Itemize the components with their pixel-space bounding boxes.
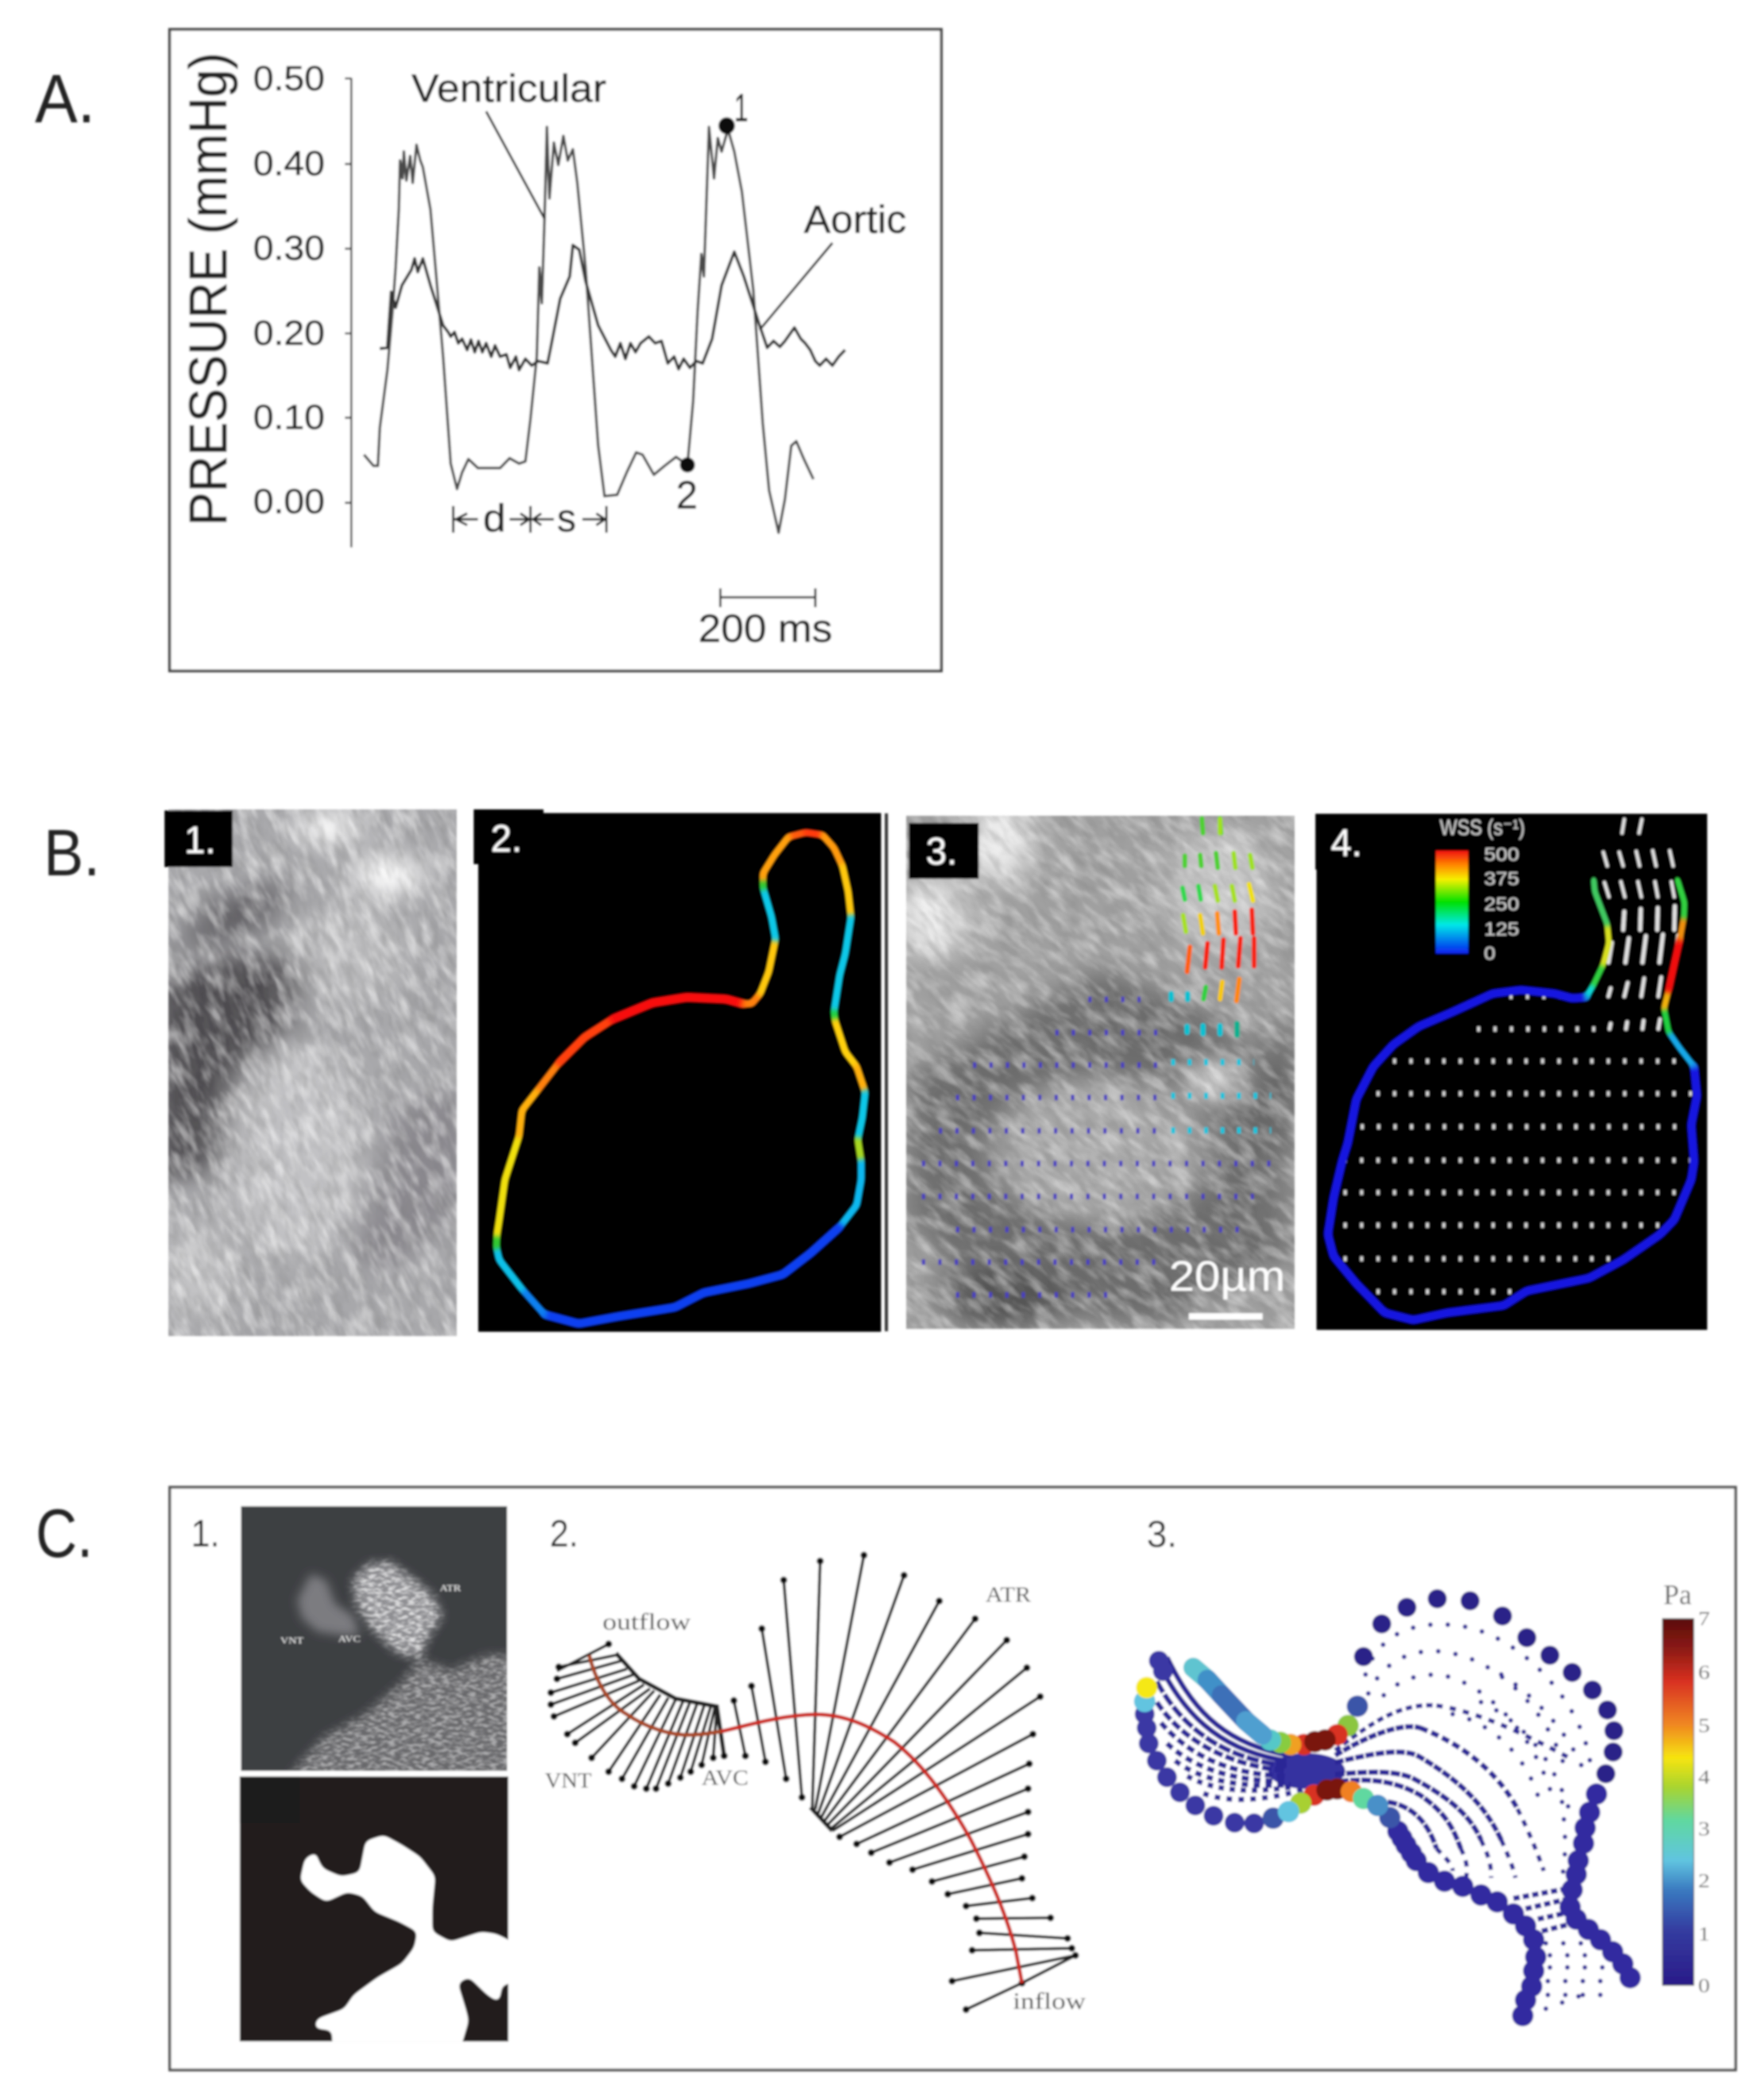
point 1 marker (719, 86, 748, 134)
time scale bar (698, 589, 832, 651)
WSS colour legend: WSS (s⁻¹) (1440, 815, 1525, 840)
divider line between B2 and B3 (885, 813, 888, 1331)
diastole and systole brackets: d (483, 496, 506, 540)
panel B2: coloured wall contour: 2. (491, 817, 522, 860)
panel B1: brightfield micrograph (167, 809, 458, 1338)
mesh labels: outflow (603, 1608, 691, 1635)
Pa colour bar: Pa (1663, 1578, 1692, 1611)
WSS contour (1328, 879, 1697, 1320)
panel B1 label: 1. (184, 819, 215, 862)
confocal image (241, 1506, 518, 1778)
y axis with ticks (345, 78, 351, 547)
Pa colour bar: 2 (1698, 1870, 1710, 1891)
label: Aortic with leader: Aortic (804, 197, 906, 241)
scale bar (1169, 1253, 1285, 1319)
point 2 marker (676, 458, 697, 516)
chart frame (170, 29, 941, 671)
heading: C.: C. (36, 1496, 93, 1572)
point 2 marker: 2 (676, 473, 697, 516)
Pa colour bar: 4 (1698, 1767, 1710, 1788)
mesh nodes (551, 1555, 1075, 2010)
heading: A.: A. (35, 61, 95, 137)
WSS colour legend: 375 (1484, 869, 1519, 889)
label C2: 2. (550, 1512, 578, 1555)
panel frame (170, 1487, 1735, 2070)
Pa colour bar: 7 (1698, 1608, 1710, 1630)
binary mask (238, 1774, 510, 2043)
Pa colour bar: 3 (1698, 1818, 1710, 1840)
panel B4: wall shear stress map (1315, 814, 1707, 1330)
y axis tick labels: 0.50 (253, 60, 325, 98)
centreline (589, 1655, 1022, 1983)
panel A: pressure trace chart (170, 29, 941, 671)
y axis tick labels (253, 60, 325, 521)
confocal image: ATR (440, 1583, 461, 1593)
y axis tick labels: 0.40 (253, 145, 325, 183)
mesh labels: AVC (701, 1765, 748, 1790)
time scale bar: 200 ms (698, 606, 832, 651)
panel B3: micrograph with velocity vectors (905, 815, 1296, 1330)
scale bar: 20µm (1169, 1253, 1285, 1300)
WSS colour legend: 0 (1484, 944, 1496, 964)
panel B2: coloured wall contour (473, 809, 881, 1332)
WSS colour legend: 500 (1484, 844, 1519, 865)
WSS colour legend: 125 (1484, 920, 1519, 940)
label: Ventricular with leader (411, 66, 607, 218)
white velocity vectors (1604, 819, 1678, 1029)
dot arcs atrium (1365, 1624, 1608, 2009)
y axis tick labels: 0.00 (253, 483, 325, 521)
diastole and systole brackets: s (557, 496, 576, 540)
mesh labels (545, 1582, 1086, 2014)
streamlines ventricle (1157, 1657, 1345, 1799)
panel B3 label: 3. (926, 830, 957, 873)
mesh labels: ATR (986, 1582, 1031, 1607)
heading: B.: B. (44, 816, 100, 890)
aortic pressure curve (380, 245, 845, 370)
mesh labels: VNT (545, 1768, 592, 1793)
label C1: 1. (191, 1512, 220, 1555)
boundary nodes (1144, 1599, 1630, 2016)
upper ventricle band (1193, 1668, 1262, 1735)
blue and cyan vector rows (922, 999, 1271, 1295)
Pa colour bar: 1 (1698, 1923, 1710, 1944)
confocal image: AVC (338, 1634, 361, 1644)
streamlines atrium (1335, 1705, 1577, 1931)
diastole and systole brackets (454, 496, 607, 540)
ventricular pressure curve (364, 127, 813, 533)
centreline mesh spokes (551, 1555, 1075, 2010)
panel B3 label (909, 823, 978, 879)
confocal image: VNT (280, 1635, 304, 1646)
black background with tab (473, 809, 881, 1332)
Pa colour bar (1662, 1578, 1710, 1997)
panel A: pressure trace chart: 1 (735, 86, 748, 129)
Pa colour bar: 5 (1698, 1715, 1710, 1736)
panel C3: shear stress streamline map (1144, 1514, 1710, 2016)
y axis tick labels: 0.30 (253, 230, 325, 268)
contour (496, 832, 865, 1324)
label: Aortic with leader (759, 197, 906, 330)
label C3: 3. (1147, 1514, 1177, 1556)
y axis tick labels: 0.20 (253, 315, 325, 353)
mesh labels: inflow (1013, 1988, 1086, 2014)
y axis title: PRESSURE (mmHg) (179, 52, 238, 526)
panel B1 label (164, 810, 233, 867)
y axis tick labels: 0.10 (253, 399, 325, 437)
WSS colour legend (1436, 815, 1525, 964)
label: Ventricular with leader: Ventricular (411, 66, 607, 110)
black background (1315, 814, 1707, 1330)
white grid points (1344, 997, 1694, 1292)
panel C: frame and content (170, 1487, 1735, 2070)
panel B4: wall shear stress map: 4. (1330, 822, 1362, 864)
Pa colour bar: 6 (1698, 1661, 1710, 1683)
WSS colour legend: 250 (1484, 894, 1519, 915)
Pa colour bar: 0 (1698, 1975, 1710, 1997)
velocity vectors (1171, 819, 1254, 1035)
